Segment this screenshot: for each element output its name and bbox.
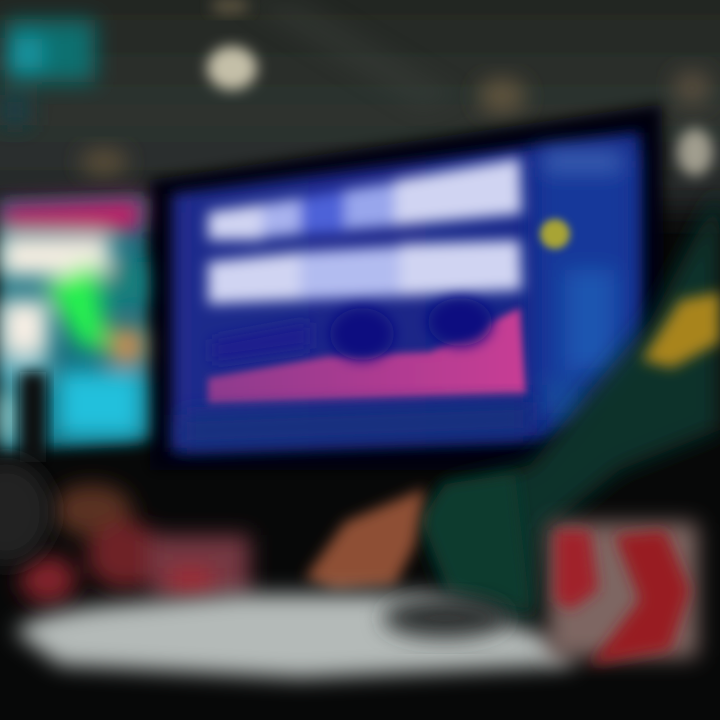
pink band [208, 308, 526, 404]
yellow dot [540, 219, 570, 249]
green shirt [420, 190, 720, 620]
left hand and objects [20, 484, 250, 604]
navy shapes over band [212, 298, 492, 362]
white headline rows [208, 158, 522, 304]
side data column [535, 150, 635, 420]
dark figure on left screen [20, 372, 46, 462]
main monitor screen [172, 132, 640, 452]
yellow shoulder accent [642, 292, 720, 368]
red and white box [548, 522, 698, 665]
white table [15, 594, 575, 678]
dark shoulder lower left [0, 460, 52, 564]
ceiling lights [80, 0, 713, 176]
main monitor frame [150, 104, 664, 470]
lower screen strip [180, 402, 530, 448]
teal ceiling sign [0, 20, 95, 125]
left rainbow screen [0, 196, 148, 462]
shadow on table [383, 598, 507, 638]
forearm [305, 488, 425, 590]
